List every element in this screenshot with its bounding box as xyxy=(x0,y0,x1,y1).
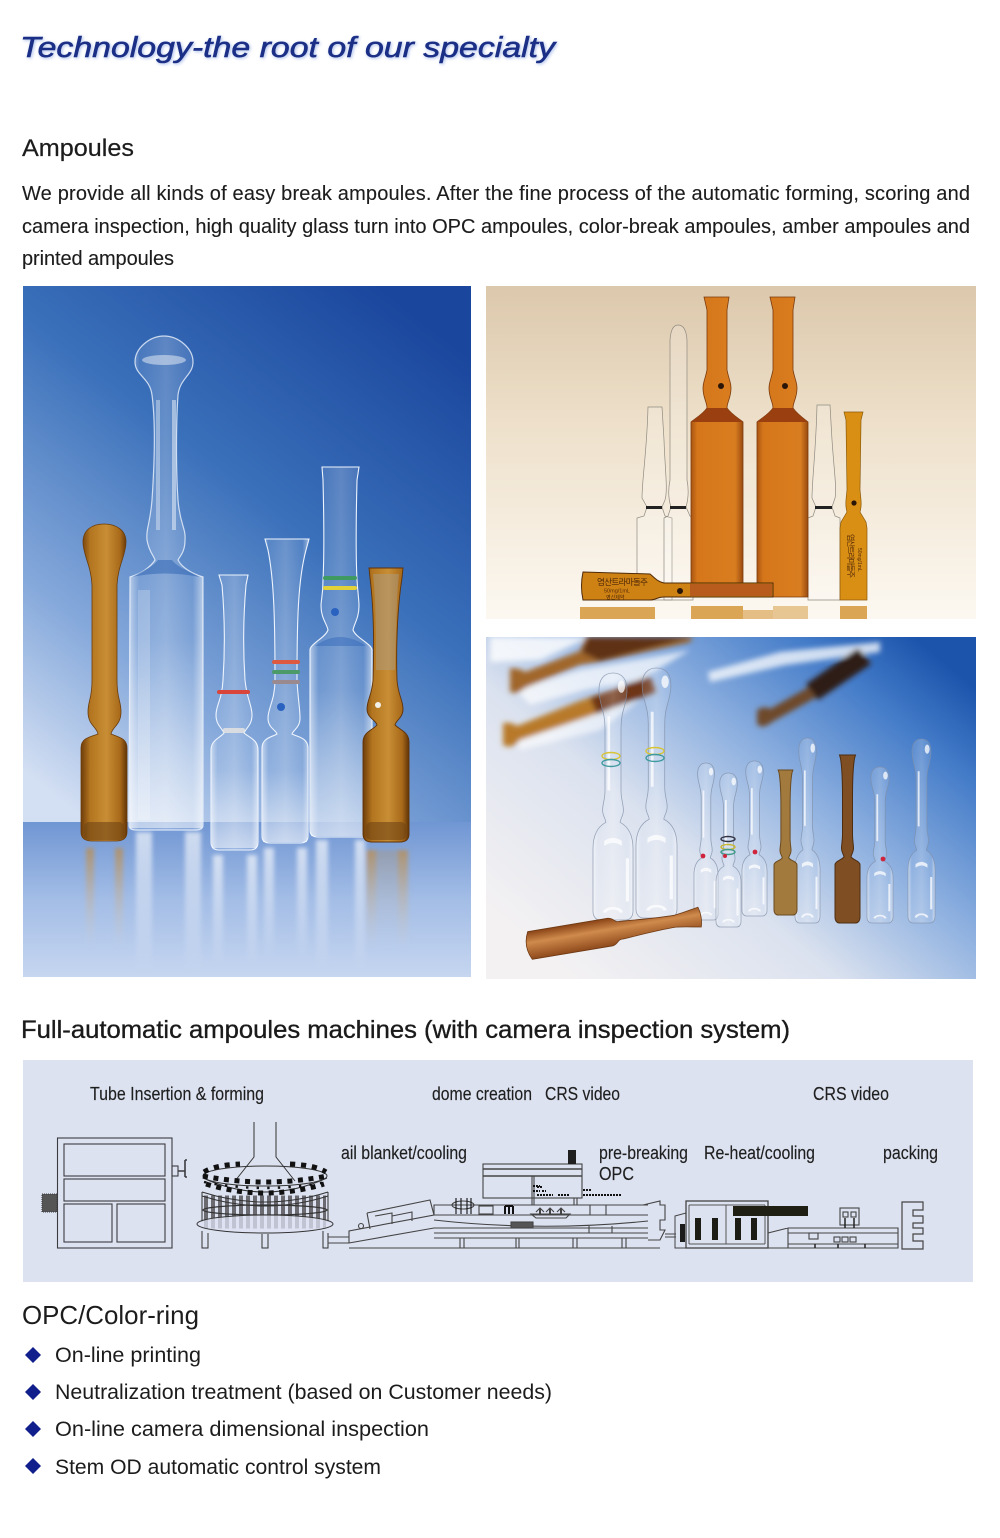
coloured rings and dots xyxy=(602,748,735,854)
small printed amber ampoule: 50mg/1mL xyxy=(856,548,862,572)
blurred background ampoules xyxy=(490,637,880,750)
intro text block: We provide all kinds of easy break ampoules. After the fine process of the automatic forming, scoring and xyxy=(22,183,970,205)
photo: ampoules on blue-white table xyxy=(486,637,976,979)
bullet: camera inspection: On-line camera dimensional inspection xyxy=(55,1418,429,1441)
lying amber ampoule xyxy=(524,903,703,960)
station labels: OPC xyxy=(599,1164,634,1184)
bullet: stem OD control: Stem OD automatic control system xyxy=(55,1456,381,1479)
tube loader cabinet xyxy=(42,1138,187,1248)
re-heat and cooling station xyxy=(675,1201,808,1248)
intro text block: printed ampoules xyxy=(22,248,174,270)
forming carousel xyxy=(197,1122,333,1248)
station labels: Tube Insertion & forming xyxy=(90,1084,264,1104)
lying amber ampoule: 염산트라마돌주 xyxy=(597,577,648,587)
clear ampoule with green and yellow rings xyxy=(310,467,372,837)
station labels: dome creation xyxy=(432,1084,532,1104)
small tan amber ampoule xyxy=(774,770,797,915)
outlet conveyor xyxy=(768,1208,898,1248)
tall clear ampoule xyxy=(129,336,203,830)
left amber ampoule xyxy=(81,524,127,841)
lying amber ampoule: 영신제약 xyxy=(606,594,625,601)
panel: machine line diagram xyxy=(23,1060,973,1282)
reflections on the floor xyxy=(83,830,411,946)
reflection on table xyxy=(580,606,867,619)
station labels: Re-heat/cooling xyxy=(704,1143,815,1163)
title: Technology-the root of our specialty xyxy=(20,32,557,64)
photo: amber ampoules on cream background xyxy=(486,286,976,619)
clear ampoules behind xyxy=(637,325,840,600)
dark amber ampoule xyxy=(835,755,860,923)
station labels: pre-breaking xyxy=(599,1143,688,1163)
glass highlights xyxy=(603,676,932,922)
lying amber ampoule: 50mg/1mL xyxy=(604,588,630,594)
station labels: CRS video xyxy=(545,1084,620,1104)
intro text block xyxy=(22,183,970,270)
large amber ampoule 2 xyxy=(757,297,808,597)
bullet: neutralization treatment: Neutralization treatment (based on Customer needs) xyxy=(55,1381,552,1404)
right amber ampoule xyxy=(363,568,409,842)
lying amber ampoule xyxy=(582,572,773,601)
station labels xyxy=(90,1084,938,1184)
heading: machines: Full-automatic ampoules machines (with camera inspection system) xyxy=(21,1016,790,1044)
station labels: CRS video xyxy=(813,1084,889,1104)
station labels: packing xyxy=(883,1143,938,1163)
heading: Ampoules: Ampoules xyxy=(22,135,134,162)
intro text block: camera inspection, high quality glass turn into OPC ampoules, color-break ampoules, amber ampoules and xyxy=(22,216,970,238)
feature list xyxy=(25,1344,552,1479)
clear ampoule with red ring xyxy=(211,575,258,850)
forming and dome-creation line xyxy=(328,1150,676,1248)
heading: OPC/Color-ring: OPC/Color-ring xyxy=(22,1300,199,1330)
large amber ampoule 1 xyxy=(691,297,743,596)
packing unit xyxy=(902,1202,923,1249)
clear ampoule with three rings xyxy=(262,539,309,843)
bullet: on-line printing: On-line printing xyxy=(55,1344,201,1367)
station labels: ail blanket/cooling xyxy=(341,1143,467,1163)
clear ampoules group xyxy=(593,668,935,927)
small printed amber ampoule xyxy=(840,412,867,600)
small printed amber ampoule: 염산트라마돌주 xyxy=(846,534,856,578)
photo: blue background ampoules xyxy=(23,286,471,977)
